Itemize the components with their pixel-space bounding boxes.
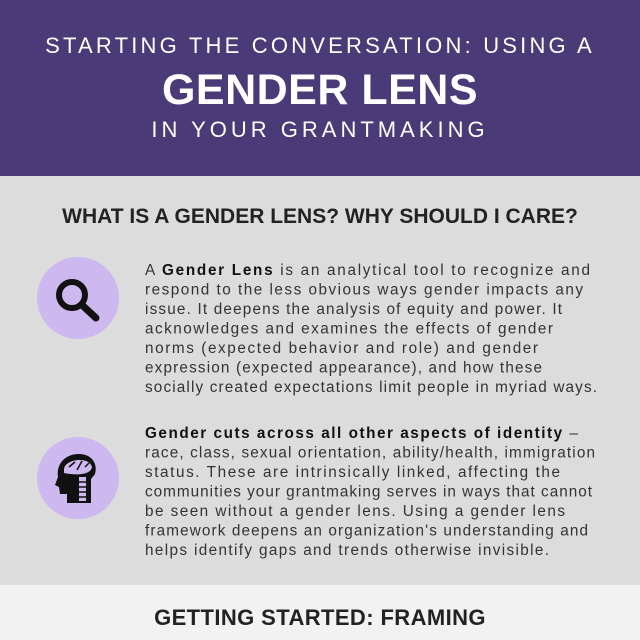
text: definition: socially created expectations limit people in myriad ways. (145, 379, 597, 396)
icon: head with brain (37, 437, 119, 519)
header banner (0, 0, 640, 176)
text: identity: be seen without a gender lens. Using a gender lens (145, 503, 565, 520)
text: identity: race, class, sexual orientation, ability/health, immigration (145, 444, 595, 462)
text: identity (145, 425, 595, 559)
text: definition: issue. It deepens the analysis of equity and power. It (145, 301, 563, 318)
footer: getting started: GETTING STARTED: FRAMING (154, 605, 486, 630)
text: identity: communities your grantmaking serves in ways that cannot (145, 484, 593, 500)
text: definition: A Gender Lens is an analytical tool to recognize and (145, 262, 590, 279)
text: identity: Gender cuts across all other aspects of identity – (145, 425, 578, 442)
text: identity: helps identify gaps and trends otherwise invisible. (145, 542, 549, 559)
text: definition: acknowledges and examines the effects of gender (145, 320, 553, 338)
title line 3: IN YOUR GRANTMAKING (151, 117, 489, 142)
text: identity: status. These are intrinsically linked, affecting the (145, 464, 560, 481)
title line 1: STARTING THE CONVERSATION: USING A (45, 33, 595, 58)
title main: GENDER LENS (162, 66, 478, 114)
text: definition: expression (expected appearance), and how these (145, 360, 542, 376)
text: definition: norms (expected behavior and role) and gender (145, 340, 538, 357)
text: definition: respond to the less obvious ways gender impacts any (145, 282, 583, 298)
icon: magnifier (37, 257, 119, 339)
footer: getting started (0, 585, 640, 640)
text: identity: framework deepens an organization's understanding and (145, 522, 588, 540)
text: definition (145, 262, 597, 396)
section heading: WHAT IS A GENDER LENS? WHY SHOULD I CARE? (62, 205, 578, 228)
